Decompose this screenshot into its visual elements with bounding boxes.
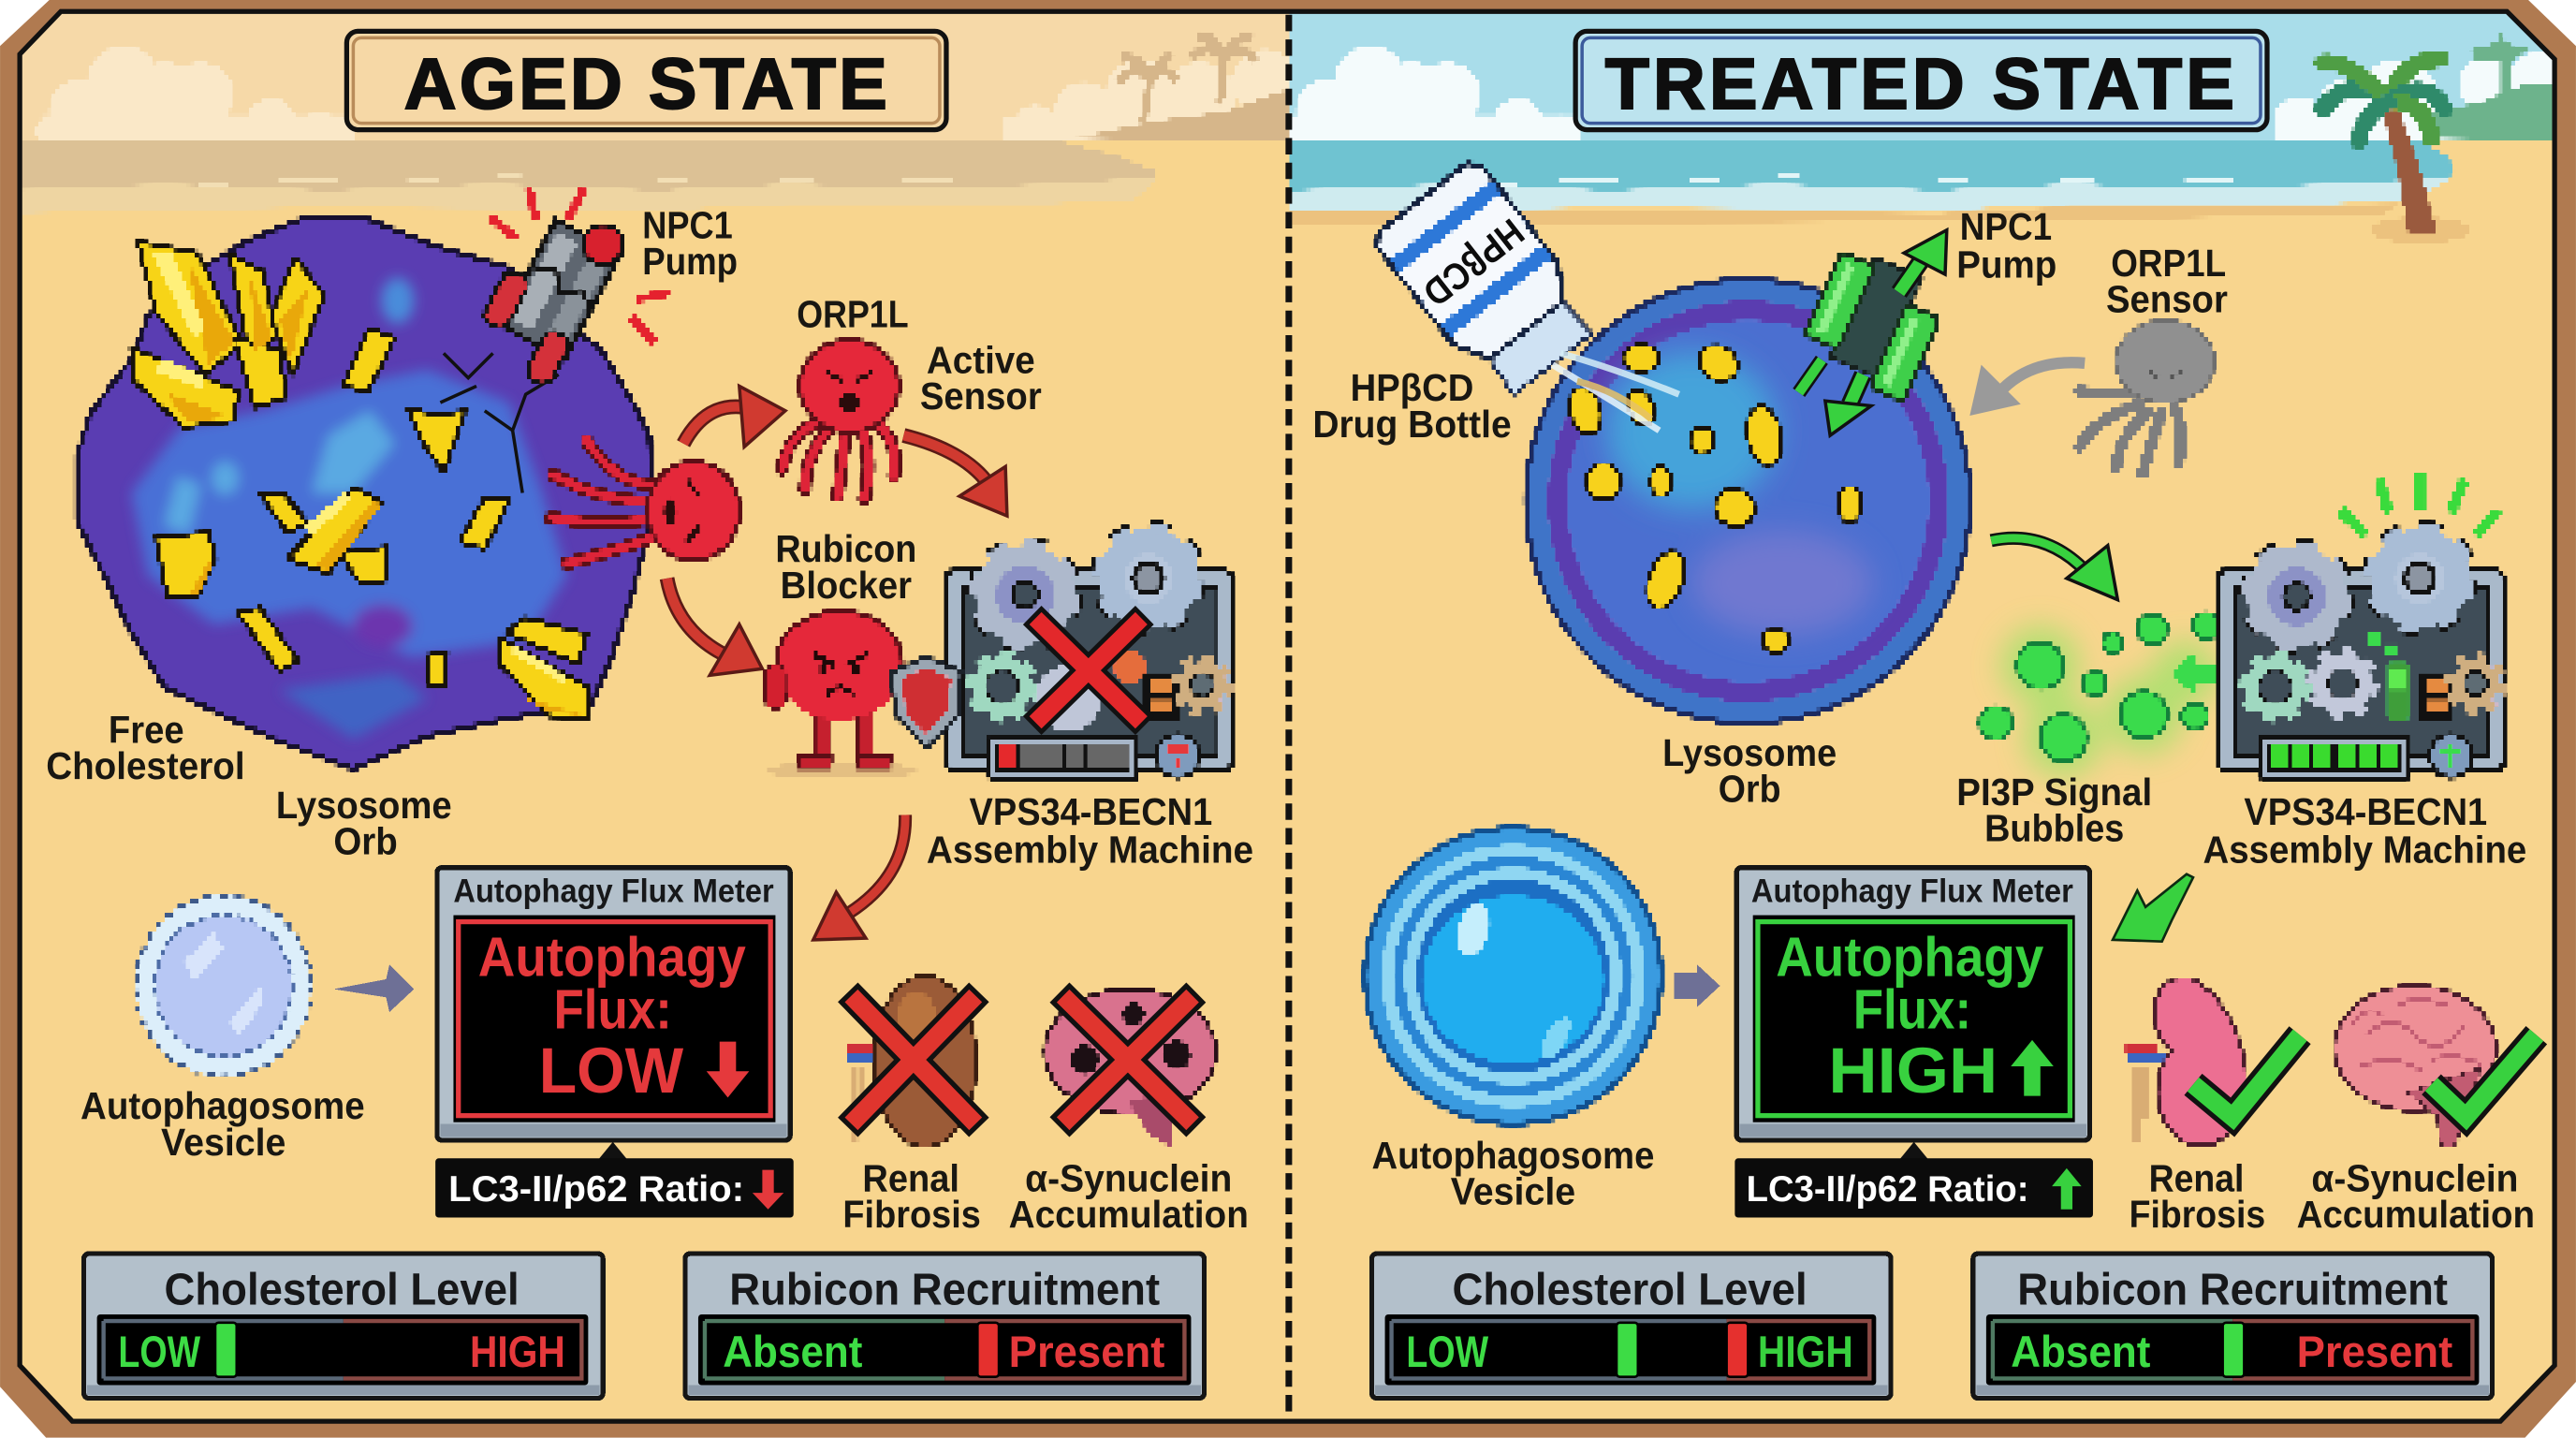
gauge: treated Rubicon recruitment: Present xyxy=(2297,1328,2453,1377)
gauge: aged Rubicon recruitment: Rubicon Recruitment xyxy=(729,1264,1160,1314)
meter reading: HIGH xyxy=(1828,1034,1998,1107)
pointer to LC3 ratio xyxy=(598,1142,627,1160)
gauge: aged Rubicon recruitment xyxy=(685,1254,1204,1399)
arrow: vesicle to meter (treated) xyxy=(1674,964,1720,1007)
membrane cracks xyxy=(440,353,559,493)
labels: aged state: Cholesterol xyxy=(46,744,245,787)
meter reading: LOW xyxy=(539,1034,684,1107)
labels: treated state: Vesicle xyxy=(1451,1169,1575,1212)
labels: aged state: NPC1 xyxy=(642,203,733,246)
icon: ORP1L sensor on membrane xyxy=(550,440,739,564)
background: treated beach xyxy=(1288,0,2576,243)
lysosome blob xyxy=(78,217,652,769)
labels: aged state: α-Synuclein xyxy=(1025,1156,1232,1199)
gauge: treated Rubicon recruitment: Absent xyxy=(2011,1328,2151,1377)
labels: treated state: Assembly Machine xyxy=(2203,828,2526,871)
icon: damaged kidney xyxy=(848,976,976,1147)
meter reading: Flux: xyxy=(1853,978,1971,1041)
labels: treated state: Bubbles xyxy=(1984,807,2124,850)
gauge: treated cholesterol level: LOW xyxy=(1406,1328,1488,1377)
arrow: vesicle to meter (aged) xyxy=(333,964,414,1012)
screen border xyxy=(1758,922,2070,1116)
title: aged state: AGED STATE xyxy=(404,44,887,125)
labels: treated state: Lysosome xyxy=(1662,731,1837,774)
icon: HPβCD drug bottle xyxy=(1371,157,1604,404)
panel: treated flux meter xyxy=(1736,868,2089,1140)
inner patches xyxy=(131,278,567,740)
icon: healthy kidney xyxy=(2126,978,2246,1146)
title: treated state: TREATED STATE xyxy=(1605,44,2234,125)
labels: aged state: Orb xyxy=(333,820,398,863)
icon: PI3P signal bubbles xyxy=(1980,613,2219,777)
arrow: pump out xyxy=(1899,230,1947,292)
labels: aged state: ORP1L xyxy=(797,292,909,335)
arrow: sensor to Rubicon xyxy=(667,579,762,675)
icon: green check on kidney xyxy=(2193,1035,2300,1117)
title: aged state xyxy=(346,31,946,130)
labels: aged state: Active xyxy=(927,338,1035,381)
red cross over brain xyxy=(1070,1003,1186,1117)
labels: treated state: HPβCD xyxy=(1351,366,1473,409)
labels: aged state: Fibrosis xyxy=(842,1193,981,1236)
labels: aged state: VPS34-BECN1 xyxy=(970,790,1212,833)
red cross xyxy=(1042,624,1135,716)
labels: aged state: Rubicon xyxy=(775,527,916,570)
icon: healthy brain xyxy=(2334,986,2496,1147)
gauge: aged cholesterol level: LOW xyxy=(118,1328,200,1377)
arrow: machine to flux meter (treated) xyxy=(2113,874,2193,942)
labels: aged state: Assembly Machine xyxy=(927,828,1253,871)
gauge: aged cholesterol level: HIGH xyxy=(470,1328,565,1377)
labels: treated state xyxy=(1312,205,2535,1236)
gauge: aged Rubicon recruitment: Present xyxy=(1009,1328,1165,1377)
labels: aged state: Accumulation xyxy=(1009,1193,1249,1236)
icon: ORP1L active sensor xyxy=(782,340,899,500)
arrow: sensor to lysosome (grey) xyxy=(1969,362,2085,416)
icon: green check on brain xyxy=(2431,1035,2537,1117)
meter reading xyxy=(478,925,749,1107)
labels: treated state: α-Synuclein xyxy=(2311,1156,2519,1199)
labels: aged state xyxy=(46,203,1253,1236)
labels: treated state: Accumulation xyxy=(2297,1193,2535,1236)
panel: active VPS34-BECN1 machine xyxy=(2217,529,2504,779)
icon: red warning sparks xyxy=(490,189,670,342)
labels: treated state: Autophagosome xyxy=(1372,1134,1654,1177)
gauge: aged cholesterol level xyxy=(84,1254,603,1399)
labels: treated state: PI3P Signal xyxy=(1956,770,2152,814)
labels: aged state: Blocker xyxy=(781,564,912,607)
labels: treated state: VPS34-BECN1 xyxy=(2244,790,2487,833)
icon: cholesterol crystals xyxy=(131,242,587,718)
labels: treated state: NPC1 xyxy=(1960,205,2052,248)
icon: working NPC1 pump xyxy=(1796,244,1952,402)
meter screen xyxy=(453,916,775,1123)
pointer to LC3 ratio xyxy=(1899,1142,1928,1160)
labels: treated state: Drug Bottle xyxy=(1312,403,1512,446)
icon: inactive ORP1L sensor xyxy=(2080,320,2215,473)
background: aged beach xyxy=(0,0,1298,213)
meter reading xyxy=(1776,925,2054,1107)
meter reading: Flux: xyxy=(554,978,672,1041)
labels: aged state: Sensor xyxy=(920,374,1042,418)
panel: aged flux meter xyxy=(437,868,790,1140)
arrow: machine to flux meter (aged) xyxy=(813,814,905,940)
gauge: treated cholesterol level: Cholesterol Level xyxy=(1453,1264,1808,1314)
red cross over kidney xyxy=(857,1003,970,1117)
icon: treated autophagosome vesicle xyxy=(1365,829,1661,1123)
meter heading: Autophagy Flux Meter xyxy=(453,873,774,910)
arrow: lysosome to bubbles (green) xyxy=(1991,538,2117,600)
badge: treated LC3-II/p62 ratio xyxy=(1734,1158,2093,1217)
icon: damaged brain xyxy=(1045,990,1216,1147)
central dashed divider xyxy=(1287,15,1291,1419)
labels: treated state: Pump xyxy=(1956,243,2056,286)
labels: aged state: Pump xyxy=(642,240,738,283)
icon: green activity rays xyxy=(2341,473,2498,536)
badge: treated LC3-II/p62 ratio: LC3-II/p62 Ratio: xyxy=(1747,1169,2029,1210)
labels: treated state: ORP1L xyxy=(2111,242,2226,285)
icon: palm tree xyxy=(2323,59,2445,231)
gauge: aged Rubicon recruitment: Absent xyxy=(723,1328,863,1377)
panel: aged lysosome xyxy=(78,217,652,769)
icon: Rubicon blocker xyxy=(766,611,916,779)
icon: drug spray xyxy=(1553,353,1679,431)
labels: aged state: Lysosome xyxy=(276,784,452,827)
panel: blocked VPS34-BECN1 machine xyxy=(946,529,1232,779)
labels: treated state: Sensor xyxy=(2106,277,2228,320)
arrow: pump in xyxy=(1799,360,1871,435)
meter heading: Autophagy Flux Meter xyxy=(1751,873,2073,910)
icon: HPβCD drug bottle: HPβCD xyxy=(1415,211,1532,315)
meter reading: Autophagy xyxy=(478,925,746,988)
gauge: treated Rubicon recruitment xyxy=(1973,1254,2492,1399)
labels: treated state: Orb xyxy=(1719,767,1781,810)
icon: aged autophagosome vesicle xyxy=(137,895,311,1077)
panel: treated lysosome xyxy=(1526,279,1969,723)
gauge: treated cholesterol level: HIGH xyxy=(1758,1328,1853,1377)
gauge: aged cholesterol level: Cholesterol Level xyxy=(165,1264,520,1314)
badge: aged LC3-II/p62 ratio xyxy=(435,1158,794,1217)
icon: remaining cholesterol crystals xyxy=(1565,339,1862,653)
labels: aged state: Autophagosome xyxy=(80,1084,365,1127)
labels: aged state: Free xyxy=(109,708,184,751)
labels: aged state: Vesicle xyxy=(161,1121,285,1164)
icon: broken NPC1 pump xyxy=(468,211,622,388)
labels: aged state: Renal xyxy=(862,1156,959,1199)
labels: treated state: Renal xyxy=(2149,1156,2244,1199)
icon: red shield xyxy=(892,657,961,748)
gauge: treated Rubicon recruitment: Rubicon Recruitment xyxy=(2017,1264,2448,1314)
arrow: pump sensor to active sensor xyxy=(683,386,785,447)
meter reading: Autophagy xyxy=(1776,925,2043,988)
gauge: treated cholesterol level xyxy=(1372,1254,1891,1399)
labels: treated state: Fibrosis xyxy=(2130,1193,2265,1236)
screen border xyxy=(459,922,770,1116)
meter screen xyxy=(1753,916,2075,1123)
badge: aged LC3-II/p62 ratio: LC3-II/p62 Ratio: xyxy=(448,1169,744,1210)
arrow: active sensor to machine xyxy=(903,435,1007,516)
